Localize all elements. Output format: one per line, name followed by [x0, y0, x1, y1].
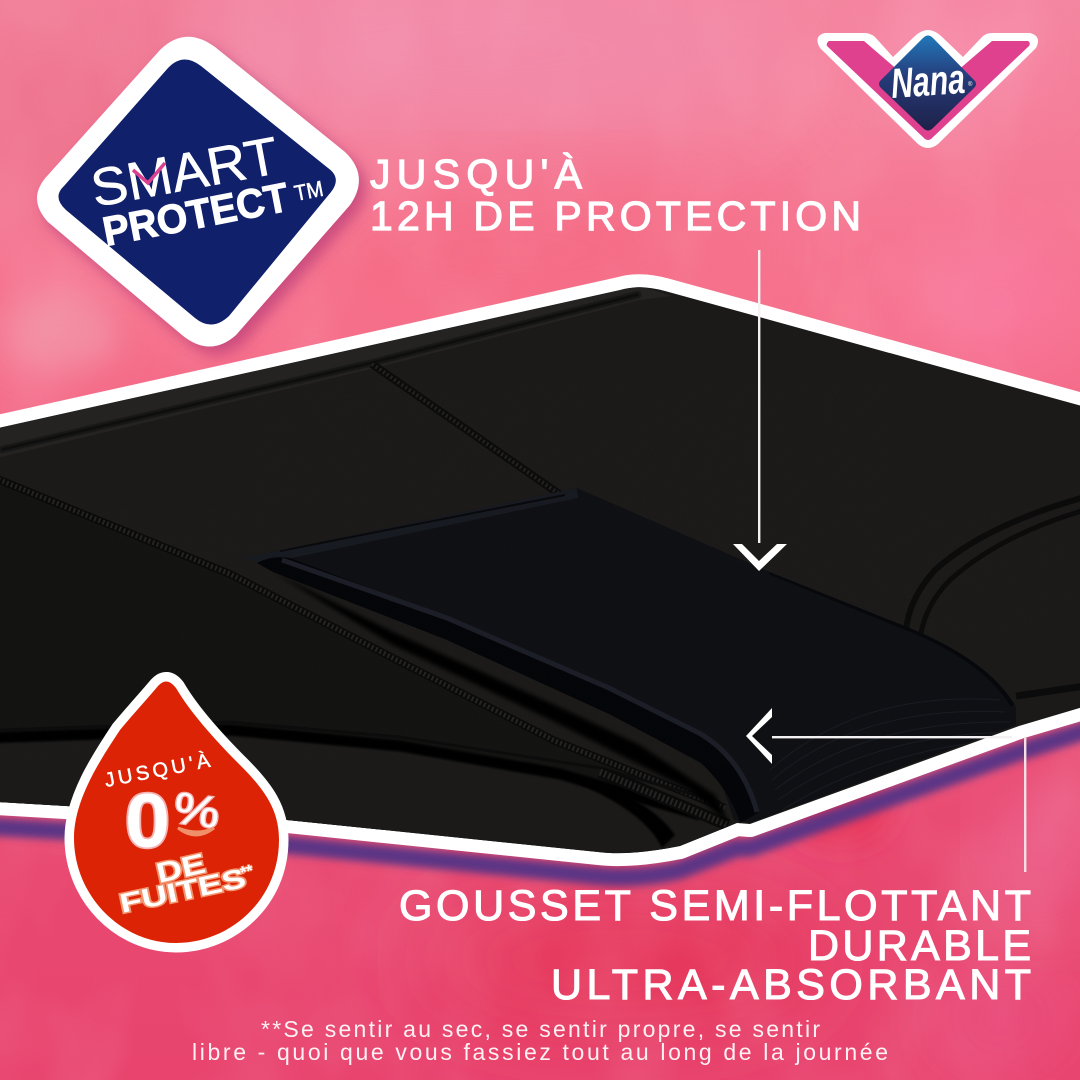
footnote: libre - quoi que vous fassiez tout au long de la journée	[192, 1039, 888, 1065]
gusset	[244, 488, 1016, 825]
gusset hem	[244, 491, 577, 561]
text block: gusset benefits: ULTRA-ABSORBANT	[551, 961, 1031, 1009]
text block: gusset benefits: DURABLE	[808, 922, 1031, 970]
lower left panel	[0, 771, 731, 830]
trademark: TM	[292, 176, 325, 206]
logo: Nana	[817, 30, 1038, 148]
seams	[0, 294, 1080, 825]
ribbed end	[770, 699, 1010, 810]
panel: black garment with white outline	[0, 274, 1080, 866]
leg fold shadow	[0, 730, 700, 815]
waistband strip	[0, 286, 672, 462]
SMART wordmark: SMART	[86, 126, 283, 219]
heading: protection duration: 12H DE PROTECTION	[370, 193, 861, 239]
gusset folded edge	[257, 557, 758, 823]
badge: Smart Protect	[37, 37, 359, 347]
logo: Nana: Nana	[889, 55, 966, 107]
drop label: fuites: FUITES	[117, 863, 248, 919]
drop smile	[178, 828, 214, 835]
text block: gusset benefits	[399, 882, 1031, 1009]
drop figure: percent: %	[171, 783, 223, 838]
drop asterisks: **	[239, 862, 256, 882]
pink chevron in M	[133, 163, 165, 183]
footnote: **Se sentir au sec, se sentir propre, se sentir	[261, 1016, 820, 1042]
logo: Nana: ®	[968, 81, 973, 88]
PROTECT wordmark: PROTECT	[99, 174, 292, 255]
heading: protection duration: JUSQU'À	[370, 151, 583, 197]
shadow beside fold	[273, 572, 730, 825]
arrow: down to gusset	[733, 250, 787, 571]
heading: protection duration	[370, 151, 861, 239]
badge: zero percent leaks drop	[74, 681, 279, 943]
drop label: de: DE	[153, 848, 208, 889]
text block: gusset benefits: GOUSSET SEMI-FLOTTANT	[399, 882, 1031, 930]
leg opening panel	[0, 802, 722, 854]
inner fold	[590, 788, 675, 848]
drop label: jusqu'à: JUSQU'À	[103, 749, 213, 792]
footnote	[192, 1016, 888, 1065]
arrow: left to gusset with elbow line	[746, 708, 1026, 872]
purple shadow under garment	[0, 726, 1080, 877]
drop figure: zero: 0	[125, 779, 170, 864]
